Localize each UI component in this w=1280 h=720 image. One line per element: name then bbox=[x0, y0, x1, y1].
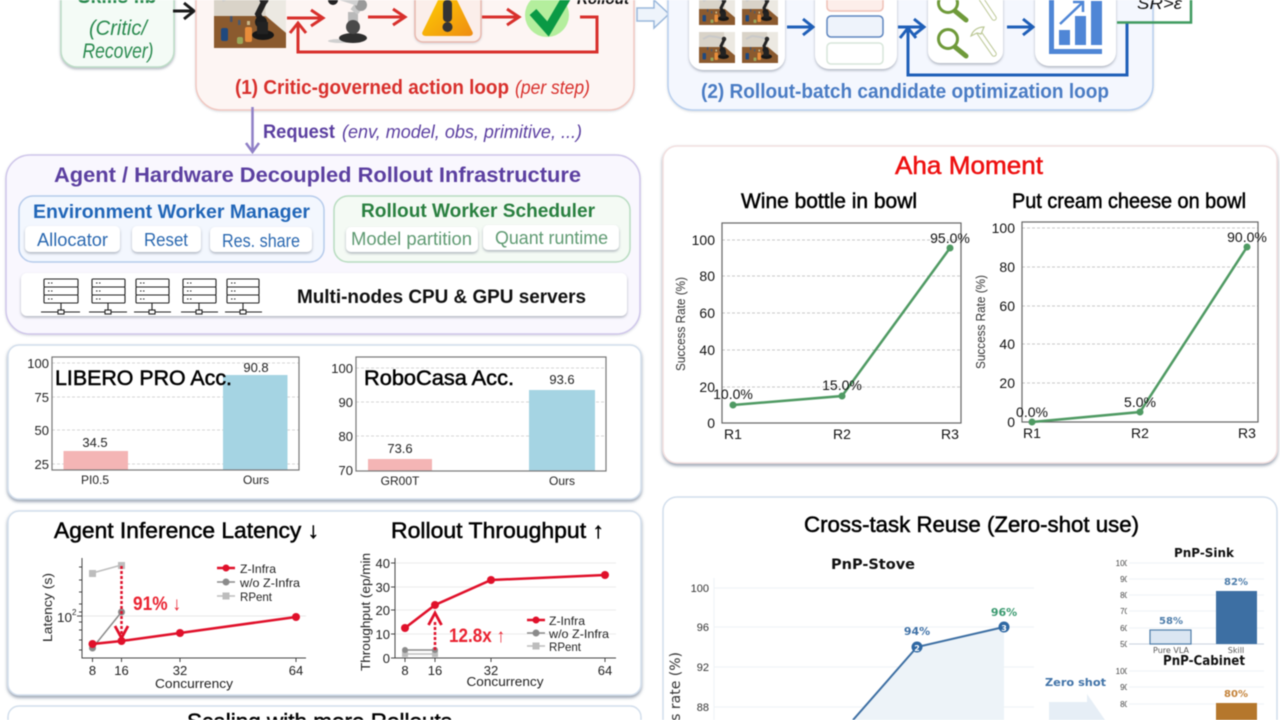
chart: pnp-stove: 94% bbox=[904, 625, 930, 638]
chart: libero pro accuracy: 50 bbox=[35, 423, 49, 438]
chart: latency: Latency (s) bbox=[40, 573, 55, 642]
chart: put cream cheese on bowl: 100 bbox=[992, 220, 1015, 236]
chart: latency: 8 bbox=[89, 663, 96, 678]
arrow: critic to check bbox=[482, 9, 519, 25]
chip: resource share: Res. share bbox=[222, 231, 300, 251]
marker: step 3 bbox=[998, 622, 1010, 633]
heading: libero pro: LIBERO PRO Acc. bbox=[55, 367, 232, 390]
heading: throughput: Rollout Throughput ↑ bbox=[391, 518, 604, 543]
icon: server racks bbox=[41, 279, 262, 314]
heading: aha moment: Aha Moment bbox=[895, 152, 1043, 180]
legend: latency: Z-Infra bbox=[240, 562, 276, 576]
chart: robocasa accuracy: GR00T bbox=[381, 474, 420, 488]
chart: pnp-sink: 80 bbox=[1120, 591, 1130, 600]
panel: environment worker manager: Environment Worker Manager bbox=[33, 202, 311, 223]
chart: pnp-sink: Skill bbox=[1228, 646, 1244, 655]
chip: reset: Reset bbox=[144, 230, 188, 250]
panel: skills library: Recover) bbox=[82, 40, 154, 63]
chart: throughput bbox=[358, 553, 616, 689]
legend: latency: w/o Z-Infra bbox=[239, 576, 300, 590]
panel: latency and throughput bbox=[8, 511, 641, 695]
chart: throughput: 16 bbox=[428, 663, 442, 678]
chart: put cream cheese on bowl: 80 bbox=[999, 259, 1015, 275]
chart: pnp-cabinet: PnP-Cabinet bbox=[1163, 653, 1245, 669]
chart: pnp-cabinet: 90 bbox=[1120, 683, 1130, 692]
chart: put cream cheese on bowl: 20 bbox=[999, 375, 1015, 391]
legend: latency bbox=[217, 562, 300, 604]
card: results chart icon bbox=[1035, 0, 1116, 66]
chart: put cream cheese on bowl: 5.0% bbox=[1124, 394, 1156, 410]
chart: libero pro accuracy: 90.8 bbox=[243, 360, 269, 375]
chart: wine bottle in bowl: R2 bbox=[833, 426, 851, 442]
legend: throughput bbox=[527, 614, 609, 654]
chart: throughput: 20 bbox=[376, 603, 390, 618]
chart: put cream cheese on bowl: 0.0% bbox=[1016, 404, 1048, 420]
chart: latency: 16 bbox=[114, 663, 129, 678]
panel: servers bbox=[21, 273, 627, 316]
caption: per step: (per step) bbox=[515, 78, 590, 99]
chart: robocasa accuracy: 80 bbox=[339, 429, 353, 444]
chip: reset bbox=[132, 226, 201, 252]
chart: latency: Concurrency bbox=[155, 676, 234, 691]
icon: check mark bbox=[525, 0, 569, 37]
chart: robocasa accuracy: 93.6 bbox=[549, 372, 575, 387]
chart: pnp-stove bbox=[668, 557, 1034, 720]
chart: put cream cheese on bowl: 60 bbox=[999, 298, 1015, 314]
card: candidates bbox=[815, 0, 897, 69]
label: zero shot: Zero shot bbox=[1045, 676, 1106, 689]
arrow: evaluation to results bbox=[1007, 19, 1033, 35]
chart: put cream cheese on bowl: Put cream cheese on bowl bbox=[1012, 190, 1246, 213]
chart: wine bottle in bowl: 40 bbox=[699, 342, 715, 358]
chart: robocasa accuracy: Ours bbox=[549, 474, 575, 488]
panel: rollout infrastructure bbox=[6, 155, 640, 334]
arrow: retry loop bbox=[900, 23, 1127, 75]
chart: wine bottle in bowl: Wine bottle in bowl bbox=[741, 190, 917, 213]
chart: libero pro accuracy bbox=[27, 356, 299, 487]
arrow: feedback loop bbox=[290, 17, 597, 52]
chart: latency bbox=[40, 558, 306, 691]
chart: pnp-stove: 100 bbox=[691, 583, 709, 595]
chart: wine bottle in bowl: 80 bbox=[699, 268, 715, 284]
chart: throughput: 32 bbox=[484, 663, 498, 678]
chart: wine bottle in bowl: 60 bbox=[699, 305, 715, 321]
chart: pnp-cabinet: 80 bbox=[1120, 700, 1130, 709]
panel: accuracy comparison bbox=[8, 345, 641, 499]
marker: step 2: 2 bbox=[914, 644, 920, 653]
chart: wine bottle in bowl: R3 bbox=[941, 426, 959, 442]
chart: latency: 32 bbox=[173, 663, 187, 678]
chart: throughput: 10 bbox=[376, 627, 390, 642]
chart: pnp-cabinet bbox=[1116, 653, 1264, 720]
chart: pnp-sink: 70 bbox=[1120, 607, 1130, 616]
chart: pnp-stove: PnP-Stove bbox=[831, 557, 915, 573]
image: robot scene bbox=[214, 0, 286, 48]
panel: critic-governed action loop bbox=[196, 0, 634, 110]
chart: put cream cheese on bowl: R1 bbox=[1023, 425, 1041, 441]
label: servers: Multi-nodes CPU & GPU servers bbox=[297, 287, 586, 308]
arrow: request bbox=[246, 107, 259, 152]
chart: wine bottle in bowl: 10.0% bbox=[713, 386, 753, 402]
heading: robocasa: RoboCasa Acc. bbox=[364, 367, 514, 390]
card: rollout thumbnails bbox=[689, 0, 785, 70]
arrow: robot to critic bbox=[368, 9, 405, 25]
chart: put cream cheese on bowl: 90.0% bbox=[1227, 229, 1267, 245]
marker: step 3: 3 bbox=[1001, 624, 1007, 633]
chart: wine bottle in bowl: 20 bbox=[699, 379, 715, 395]
chip: allocator bbox=[25, 226, 120, 252]
chart: put cream cheese on bowl: 0 bbox=[1007, 414, 1015, 430]
heading: infrastructure: Agent / Hardware Decoupled Rollout Infrastructure bbox=[54, 163, 581, 187]
chart: pnp-sink: PnP-Sink bbox=[1174, 545, 1235, 560]
chart: pnp-sink: 82% bbox=[1224, 577, 1248, 588]
heading: cross-task reuse: Cross-task Reuse (Zero-shot use) bbox=[804, 512, 1139, 537]
chart: libero pro accuracy: 25 bbox=[35, 457, 49, 472]
chart: wine bottle in bowl: 15.0% bbox=[822, 377, 862, 393]
chart: robocasa accuracy bbox=[331, 357, 606, 488]
chart: throughput: Concurrency bbox=[466, 674, 544, 689]
box: success threshold bbox=[1117, 0, 1191, 22]
chart: libero pro accuracy: 34.5 bbox=[82, 435, 108, 450]
chart: pnp-sink: 100 bbox=[1116, 559, 1130, 568]
chart: robocasa accuracy: 73.6 bbox=[387, 441, 413, 456]
chip: resource share bbox=[210, 227, 312, 252]
chart: latency: 10 bbox=[57, 610, 72, 625]
chart: wine bottle in bowl: Success Rate (%) bbox=[673, 277, 688, 371]
panel: rollout worker scheduler: Rollout Worker Scheduler bbox=[361, 201, 596, 222]
chart: pnp-sink: 58% bbox=[1159, 616, 1183, 627]
panel: rollout worker scheduler bbox=[334, 196, 630, 262]
callout: 12.8x: 12.8x ↑ bbox=[449, 626, 505, 647]
heading: latency: Agent Inference Latency ↓ bbox=[54, 518, 319, 543]
chart: libero pro accuracy: 75 bbox=[35, 390, 49, 405]
chart: put cream cheese on bowl: R2 bbox=[1131, 425, 1149, 441]
marker: step 2 bbox=[912, 642, 922, 653]
panel: scaling with more rollouts bbox=[8, 706, 641, 720]
chart: libero pro accuracy: Ours bbox=[243, 473, 269, 487]
caption: critic-governed action loop: (1) Critic-governed action loop bbox=[235, 77, 509, 99]
chart: put cream cheese on bowl: R3 bbox=[1238, 425, 1256, 441]
arrow: zero shot bbox=[1049, 694, 1105, 720]
chart: pnp-sink: Pure VLA bbox=[1153, 646, 1189, 655]
chart: pnp-cabinet: 100 bbox=[1116, 667, 1130, 676]
chart: throughput: 30 bbox=[376, 580, 390, 595]
card: evaluation tools bbox=[928, 0, 1003, 63]
caption: rollout-batch candidate optimization loop: (2) Rollout-batch candidate optimization loop bbox=[701, 81, 1109, 103]
chart: pnp-sink: 50 bbox=[1120, 640, 1130, 649]
chart: robocasa accuracy: 100 bbox=[331, 361, 353, 376]
hollow arrow: loop 1 to loop 2 bbox=[637, 0, 669, 28]
legend: throughput: Z-Infra bbox=[549, 614, 585, 628]
chart: pnp-stove: 96% bbox=[991, 606, 1017, 619]
chart: pnp-stove: 96 bbox=[697, 622, 709, 634]
chart: put cream cheese on bowl: Success Rate (%) bbox=[973, 275, 988, 369]
chart: put cream cheese on bowl bbox=[973, 190, 1267, 441]
arrow: scene to robot bbox=[287, 10, 323, 26]
chart: robocasa accuracy: 90 bbox=[339, 395, 353, 410]
chart: wine bottle in bowl bbox=[673, 190, 970, 442]
chart: throughput: 40 bbox=[376, 556, 390, 571]
chart: wine bottle in bowl: 100 bbox=[692, 232, 715, 248]
label: request: (env, model, obs, primitive, ...) bbox=[342, 122, 582, 142]
chart: throughput: 64 bbox=[598, 663, 612, 678]
chart: wine bottle in bowl: 0 bbox=[707, 415, 715, 431]
arrow: skills to critic loop bbox=[173, 3, 194, 19]
chart: latency: 2 bbox=[72, 608, 77, 617]
chip: quant runtime bbox=[483, 225, 619, 250]
legend: throughput: RPent bbox=[549, 640, 582, 654]
panel: skills library bbox=[61, 0, 174, 67]
chart: pnp-sink: 90 bbox=[1120, 575, 1130, 584]
chart: robocasa accuracy: 70 bbox=[339, 463, 353, 478]
chart: libero pro accuracy: 100 bbox=[27, 356, 49, 371]
chip: allocator: Allocator bbox=[37, 230, 108, 250]
callout: 91 percent: 91% ↓ bbox=[133, 594, 181, 615]
arrow: throughput gain bbox=[428, 613, 442, 650]
chart: pnp-cabinet: 80% bbox=[1224, 689, 1248, 700]
panel: cross-task reuse bbox=[663, 497, 1277, 720]
legend: latency: RPent bbox=[240, 590, 273, 604]
chart: pnp-sink: 60 bbox=[1120, 624, 1130, 633]
icon: warning bbox=[415, 0, 481, 42]
chart: throughput: Throughput (ep/min bbox=[358, 553, 373, 671]
chart: throughput: 0 bbox=[383, 651, 390, 666]
chart: wine bottle in bowl: 95.0% bbox=[930, 230, 970, 246]
arrow: latency reduction bbox=[115, 566, 128, 638]
chart: pnp-stove: 88 bbox=[697, 702, 709, 714]
chart: put cream cheese on bowl: 40 bbox=[999, 336, 1015, 352]
chart: pnp-stove: 92 bbox=[697, 662, 709, 674]
chart: throughput: 8 bbox=[401, 663, 409, 678]
text: critic recover: (Critic/ bbox=[89, 17, 149, 40]
arrow: thumbnails to candidates bbox=[787, 19, 813, 35]
chart: pnp-sink bbox=[1116, 545, 1264, 655]
icon: robot arm bbox=[328, 0, 367, 43]
chart: wine bottle in bowl: R1 bbox=[724, 426, 742, 442]
chart: libero pro accuracy: PI0.5 bbox=[81, 473, 109, 487]
panel: candidate optimization loop bbox=[668, 0, 1153, 110]
panel: environment worker manager bbox=[19, 196, 324, 262]
panel: aha moment bbox=[663, 146, 1277, 463]
chip: quant runtime: Quant runtime bbox=[495, 228, 608, 248]
chart: latency: 64 bbox=[289, 663, 303, 678]
chip: model partition: Model partition bbox=[351, 229, 472, 249]
legend: throughput: w/o Z-Infra bbox=[548, 627, 609, 641]
arrow: candidates to evaluation bbox=[898, 19, 924, 35]
label: request: Request bbox=[263, 122, 336, 143]
